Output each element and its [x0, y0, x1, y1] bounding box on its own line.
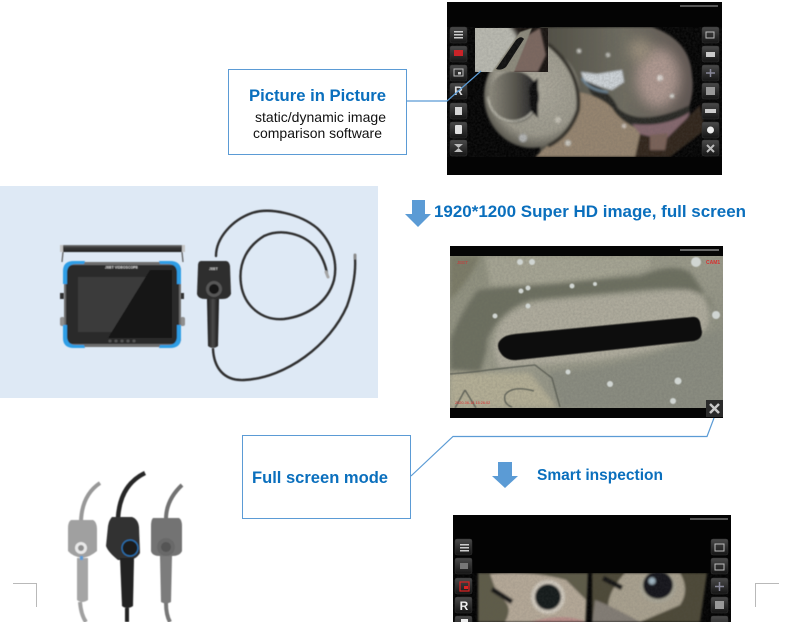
- blue corner bumpers: [63, 261, 85, 284]
- dark weld valley: [586, 82, 691, 127]
- product: videoscope tablet and probe: [60, 211, 355, 380]
- full screen button: [706, 400, 723, 417]
- lower region: [551, 364, 633, 402]
- callout: full screen mode: [242, 436, 410, 518]
- probe handpiece: JEET: [209, 267, 219, 271]
- leader line: full screen: [411, 418, 714, 476]
- panel: product photo backdrop: [0, 186, 378, 398]
- rust band: [632, 112, 690, 142]
- upper casting: [540, 27, 693, 157]
- toolbar buttons left: R: [454, 84, 463, 98]
- probe handpiece: [197, 261, 231, 348]
- tablet body: JEET VIDEOSCOPE: [105, 266, 139, 270]
- screenshot: picture in picture: [447, 2, 722, 175]
- arrow: to full screen: [405, 200, 431, 227]
- callout: full screen mode: Full screen mode: [252, 469, 388, 487]
- status bar: [680, 5, 718, 7]
- callout: picture in picture: comparison software: [253, 125, 382, 141]
- slot opening: [498, 317, 702, 360]
- weld spatter: [581, 70, 624, 90]
- top band: [485, 256, 650, 285]
- dark rim around slot plateau: [450, 268, 722, 372]
- toolbar buttons left: [450, 27, 467, 156]
- toolbar buttons right: [702, 27, 719, 156]
- screenshot: full screen image: CAM1: [706, 260, 720, 266]
- leader line: picture in picture: [407, 71, 481, 101]
- screenshot: full screen image: [450, 246, 723, 418]
- callout description: static/dynamic image: [255, 109, 386, 125]
- collar: [484, 44, 580, 148]
- insertion tube and cables: [213, 211, 355, 380]
- on-screen labels: JEET: [457, 260, 468, 265]
- screenshot: smart inspection: [453, 515, 731, 622]
- callout title: Picture in Picture: [249, 87, 386, 105]
- product: three probe handpieces: [68, 473, 182, 622]
- crop mark: right: [756, 584, 779, 607]
- screenshot: full screen image: 2020-06-18 15:26:02: [455, 401, 490, 405]
- heading: resolution: 1920*1200 Super HD image, full screen: [434, 203, 746, 221]
- callout: picture in picture: [228, 70, 406, 154]
- inset picture: [475, 28, 548, 72]
- plateau around slot: [494, 290, 709, 368]
- smart inspection toolbar right: [711, 539, 728, 622]
- handpiece: dark grey right: [151, 485, 182, 622]
- handpiece: grey left: [68, 483, 100, 622]
- casting letters and ridge: [450, 365, 560, 408]
- lower tan region: [535, 92, 650, 157]
- crop mark: left: [13, 584, 36, 607]
- tablet handle: [60, 245, 185, 326]
- smart inspection toolbar left: R: [460, 599, 469, 613]
- tablet body: [63, 261, 181, 348]
- arrow: to smart inspection: [492, 462, 518, 488]
- heading: smart inspection: Smart inspection: [537, 467, 663, 484]
- handpiece: black centre: [106, 473, 145, 622]
- smart inspection toolbar left: [455, 539, 472, 622]
